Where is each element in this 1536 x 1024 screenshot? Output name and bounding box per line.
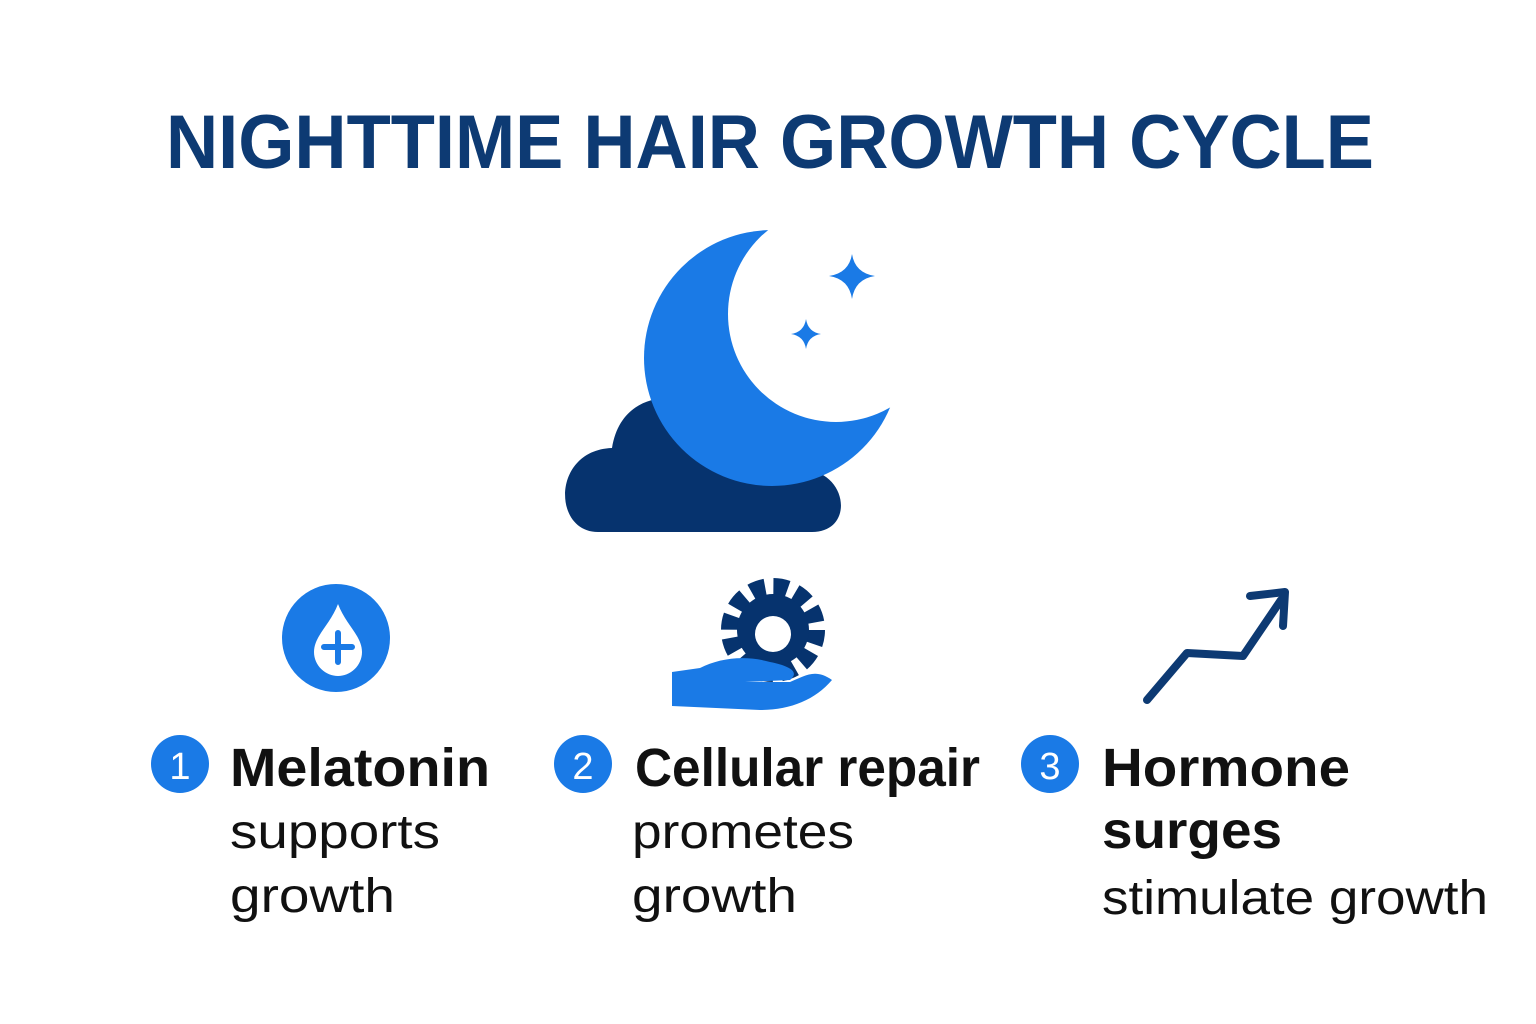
- step 2: growth: [632, 870, 797, 923]
- step 1: 1: [169, 746, 191, 788]
- step 3: Hormone: [1102, 738, 1350, 798]
- step 3: [1021, 735, 1488, 925]
- step 1: supports: [230, 806, 440, 859]
- star small: [791, 319, 821, 349]
- icon: rising arrow: [1147, 592, 1285, 700]
- star large: [829, 254, 875, 299]
- step 2: [554, 735, 980, 923]
- step 3: 3: [1039, 746, 1061, 788]
- step 2: 2: [572, 746, 594, 788]
- step 1: [151, 735, 490, 923]
- title: NIGHTTIME HAIR GROWTH CYCLE: [166, 100, 1374, 185]
- step 3: stimulate growth: [1102, 872, 1488, 925]
- step 2: prometes: [632, 806, 854, 859]
- cloud: [565, 398, 841, 532]
- step 1: growth: [230, 870, 395, 923]
- step 3: surges: [1102, 802, 1282, 860]
- icon: cellular repair gear and hand: [672, 588, 832, 710]
- step 1: Melatonin: [230, 738, 490, 798]
- icon: moon and cloud: [565, 230, 900, 532]
- icon: melatonin drop: [282, 584, 390, 692]
- step 2: Cellular repair: [635, 738, 980, 798]
- moon: [644, 230, 900, 486]
